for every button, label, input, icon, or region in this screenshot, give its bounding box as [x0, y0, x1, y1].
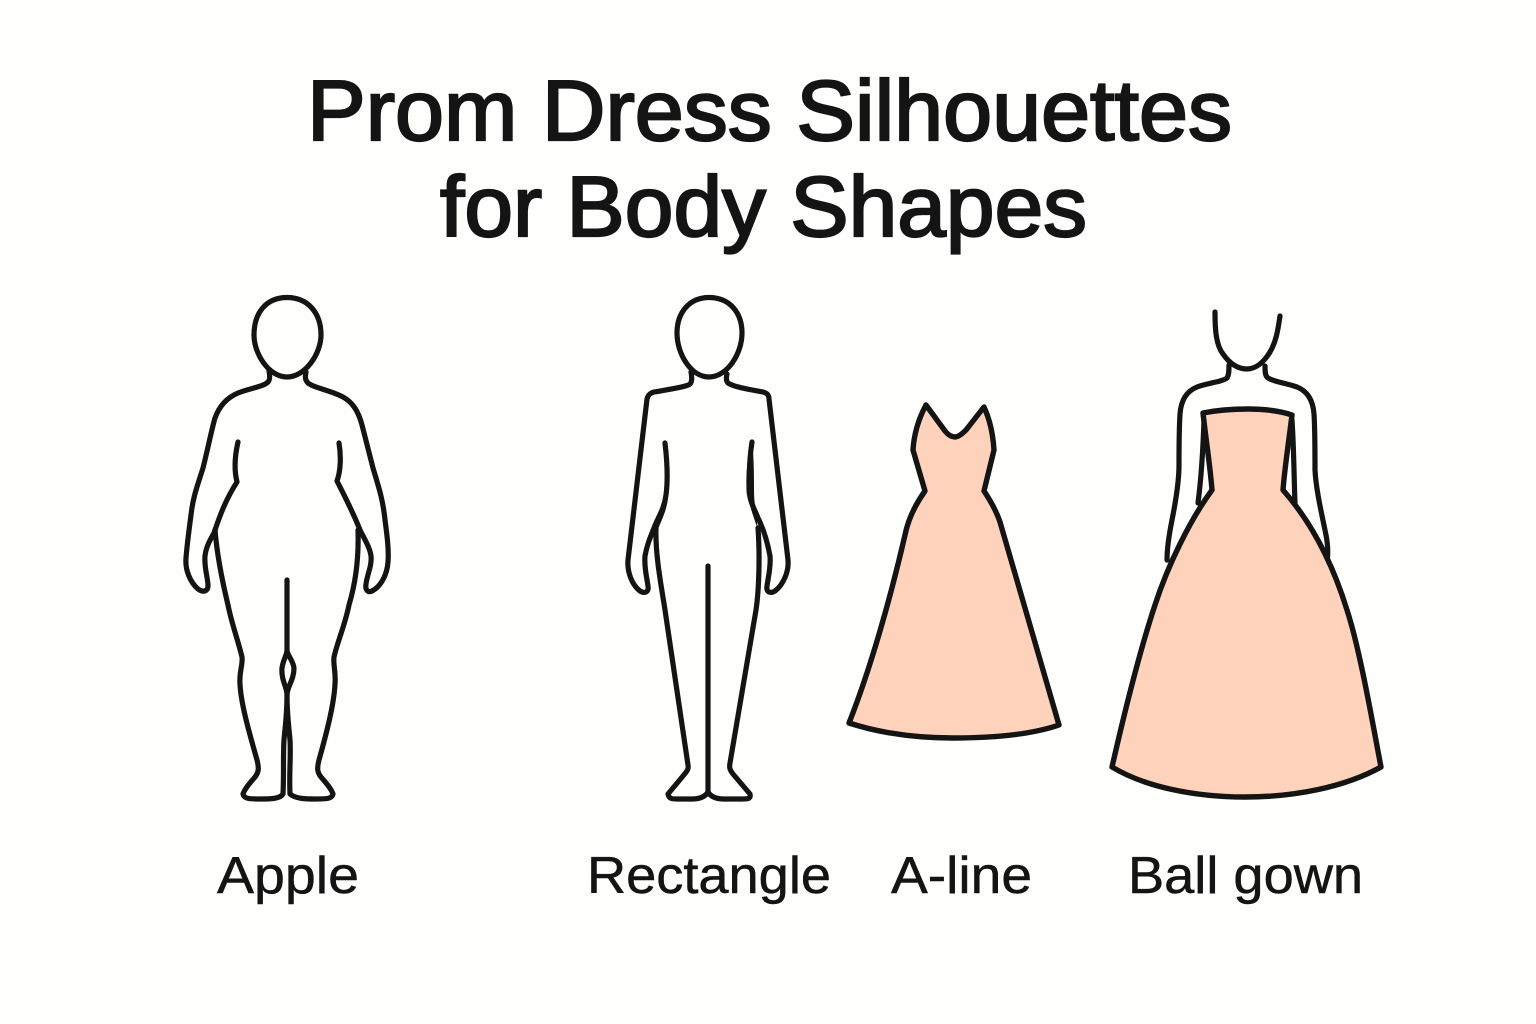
title: for Body Shapes	[440, 160, 1087, 255]
body taper: waist shading, rectangle	[746, 442, 758, 530]
label: rectangle: Rectangle	[587, 847, 831, 905]
title: Prom Dress Silhouettes	[307, 64, 1232, 159]
label: ball gown: Ball gown	[1128, 847, 1363, 905]
figure: a-line dress	[849, 405, 1059, 738]
label: a-line: A-line	[891, 847, 1032, 905]
figure: ball gown	[1112, 312, 1381, 797]
figure: rectangle body shape	[628, 298, 788, 799]
label: apple: Apple	[217, 847, 359, 905]
title	[307, 64, 1232, 255]
body taper: left waist, rectangle	[652, 497, 668, 535]
figure: apple body shape	[186, 298, 388, 799]
